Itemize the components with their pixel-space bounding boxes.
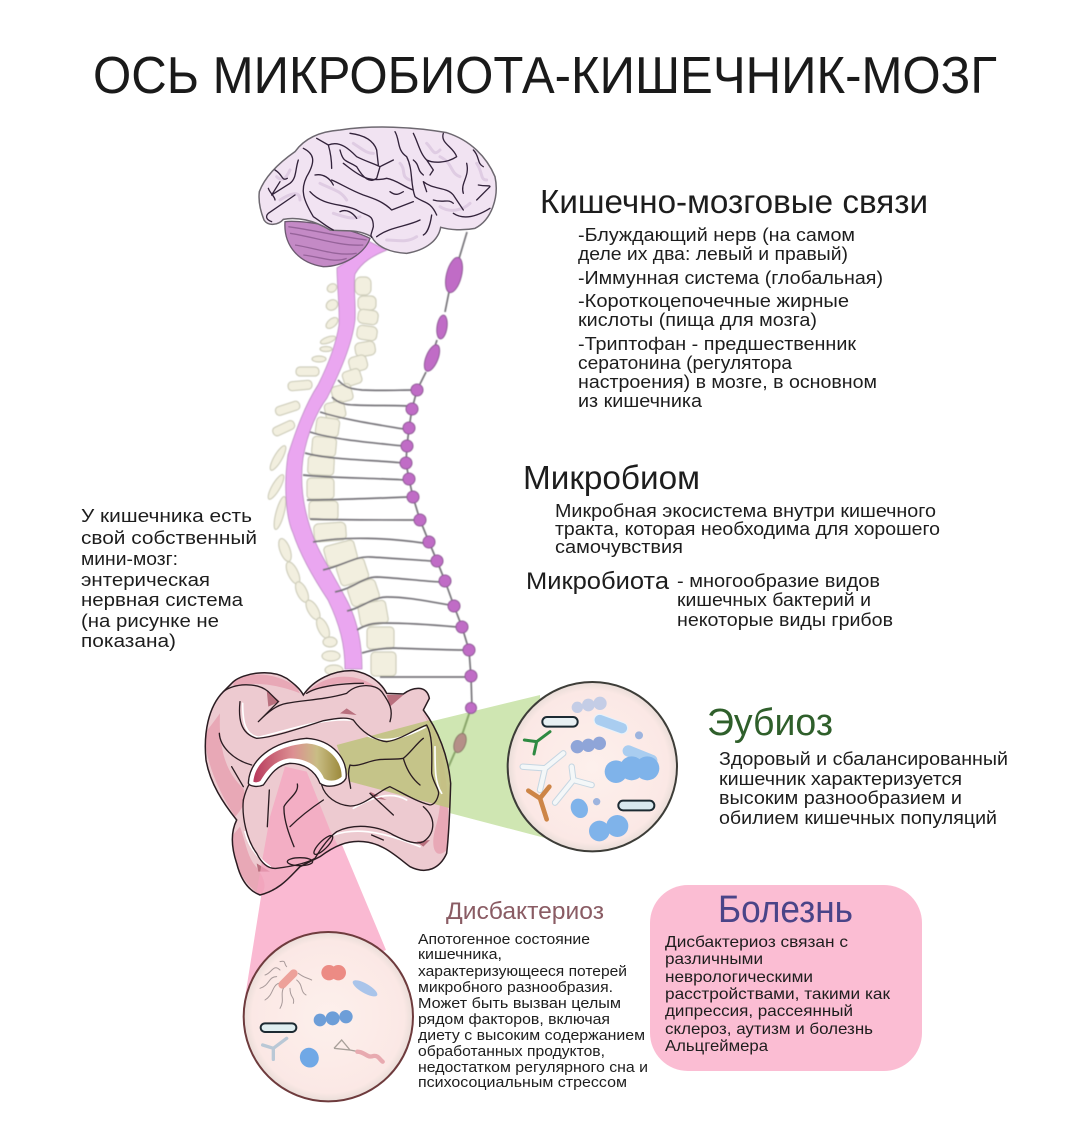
pink ray to dysbiosis lens: [243, 840, 386, 1010]
inflamed lumen: [248, 738, 346, 786]
heading: microbiota: Микробиота: [526, 568, 670, 595]
lens: [508, 682, 677, 851]
lens: [244, 932, 413, 1101]
text block: eubiosis: высоким разнообразием и: [719, 788, 962, 808]
nerve branches: [303, 232, 472, 768]
text block: eubiosis: Здоровый и сбалансированный: [719, 749, 1008, 769]
title: ОСЬ МИКРОБИОТА-КИШЕЧНИК-МОЗГ: [93, 47, 997, 105]
text block: enteric nervous system: нервная система: [81, 590, 244, 610]
intestine silhouette: [205, 671, 451, 895]
bowel contours: [219, 683, 439, 868]
text block: dysbiosis: [418, 932, 648, 1091]
text block: microbiota: кишечных бактерий и: [677, 590, 871, 610]
text block: gut-brain links: из кишечника: [578, 391, 703, 411]
text block: microbiome: Микробная экосистема внутри кишечного: [555, 501, 936, 521]
heading: disease: Болезнь: [718, 889, 853, 931]
text block: gut-brain links: кислоты (пища для мозга): [578, 310, 817, 330]
text block: disease: различными: [665, 951, 763, 968]
text block: dysbiosis: микробного разнообразия.: [418, 980, 613, 996]
heading: gut-brain links: Кишечно-мозговые связи: [540, 183, 928, 220]
heading: dysbiosis: Дисбактериоз: [446, 898, 604, 925]
text block: eubiosis: обилием кишечных популяций: [719, 808, 997, 828]
highlights: [243, 703, 442, 867]
text block: enteric nervous system: показана): [81, 631, 176, 651]
text block: dysbiosis: обработанных продуктов,: [418, 1044, 605, 1060]
green ray to eubiosis lens: [400, 695, 545, 838]
text block: microbiome: тракта, которая необходима для хорошего: [555, 519, 940, 539]
cerebrum: [259, 127, 496, 253]
text block: microbiota: некоторые виды грибов: [677, 610, 893, 630]
olive zone: [337, 720, 457, 810]
text block: enteric nervous system: энтерическая: [81, 570, 210, 590]
illustration: brain: [259, 127, 496, 267]
text block: enteric nervous system: (на рисунке не: [81, 611, 219, 631]
text block: disease: неврологическими: [665, 969, 813, 986]
microbe view: eubiosis: [508, 682, 677, 851]
spinal cord: [286, 241, 387, 669]
text block: enteric nervous system: [81, 506, 257, 651]
text block: enteric nervous system: мини-мозг:: [81, 549, 178, 569]
text block: gut-brain links: -Короткоцепочечные жирные: [578, 291, 849, 311]
cortex shading: [277, 143, 487, 241]
text block: enteric nervous system: свой собственный: [81, 528, 257, 548]
microbe view: dysbiosis: [244, 932, 413, 1101]
text block: dysbiosis: недостатком регулярного сна и: [418, 1060, 648, 1076]
text block: gut-brain links: [578, 225, 883, 411]
text block: gut-brain links: -Иммунная система (глобальная): [578, 268, 883, 288]
bacteria: [523, 697, 659, 841]
heading: microbiome: Микробиом: [523, 459, 700, 496]
text block: eubiosis: кишечник характеризуется: [719, 769, 962, 789]
text block: microbiome: [555, 501, 940, 557]
ganglia chain: [400, 256, 477, 754]
text block: disease: Альцгеймера: [665, 1038, 768, 1055]
illustration: spine and nerves: [266, 232, 477, 768]
text block: dysbiosis: диету с высоким содержанием: [418, 1028, 645, 1044]
text block: gut-brain links: -Блуждающий нерв (на самом: [578, 225, 855, 245]
vertebrae: [266, 277, 396, 676]
text block: gut-brain links: деле их два: левый и правый): [578, 244, 848, 264]
shaded walls and overlays: [205, 675, 457, 910]
text block: gut-brain links: -Триптофан - предшественник: [578, 334, 856, 354]
text block: disease: дипрессия, рассеянный: [665, 1003, 853, 1020]
text block: dysbiosis: психосоциальным стрессом: [418, 1075, 627, 1091]
text block: disease: Дисбактериоз связан с: [665, 934, 848, 951]
text block: gut-brain links: настроения) в мозге, в основном: [578, 372, 877, 392]
text block: microbiota: [677, 571, 893, 630]
silhouette outline: [205, 671, 451, 895]
cerebellum: [285, 221, 370, 267]
text block: dysbiosis: Апотогенное состояние: [418, 932, 590, 948]
bacteria: [260, 961, 383, 1071]
text block: disease: [665, 934, 891, 1055]
text block: gut-brain links: сератонина (регулятора: [578, 353, 793, 373]
heading: eubiosis: Эубиоз: [707, 702, 833, 744]
pink zone: [256, 766, 338, 894]
text block: dysbiosis: характеризующееся потерей: [418, 964, 627, 980]
text block: enteric nervous system: У кишечника есть: [81, 506, 252, 526]
text block: disease: расстройствами, такими как: [665, 986, 891, 1003]
illustration: intestines: [205, 671, 457, 910]
gyri: [267, 132, 490, 237]
text block: microbiota: - многообразие видов: [677, 571, 880, 591]
text block: dysbiosis: Может быть вызван целым: [418, 996, 621, 1012]
text block: disease: склероз, аутизм и болезнь: [665, 1021, 873, 1038]
text block: eubiosis: [719, 749, 1008, 828]
panel: disease: [650, 885, 922, 1071]
text block: dysbiosis: рядом факторов, включая: [418, 1012, 610, 1028]
text block: dysbiosis: кишечника,: [418, 947, 502, 963]
text block: microbiome: самочувствия: [555, 537, 683, 557]
